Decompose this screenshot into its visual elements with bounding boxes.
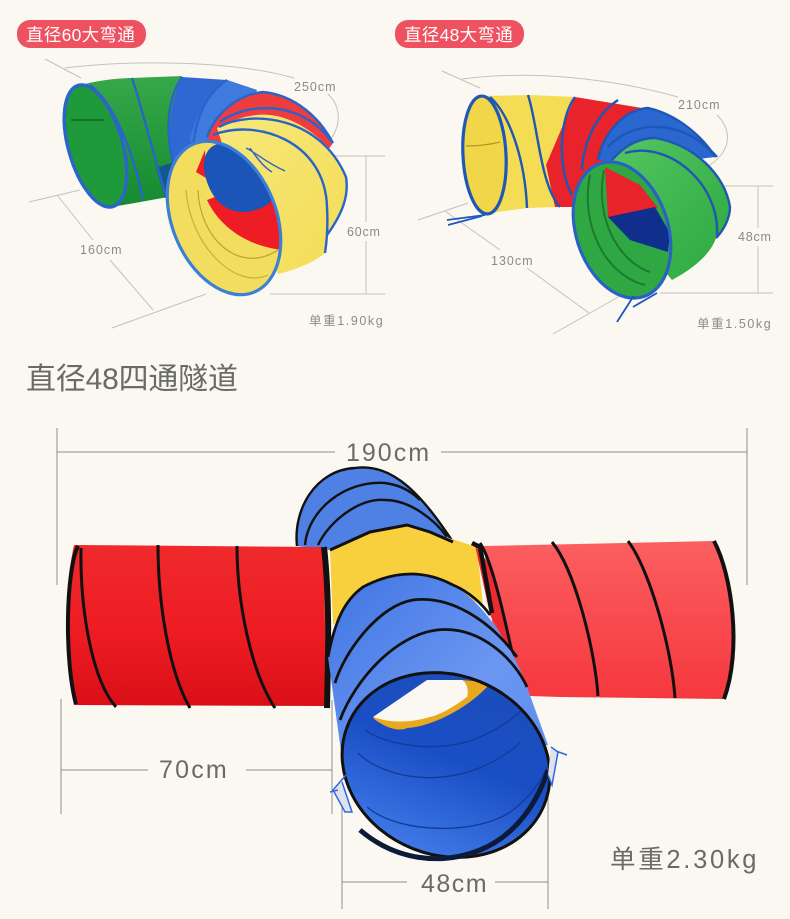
label: 70cm: 70cm	[159, 756, 229, 784]
yellow back section	[217, 115, 347, 274]
label: weight 1.50kg: 单重1.50kg	[697, 316, 772, 331]
yellow section	[482, 95, 575, 213]
label: 60cm: 60cm	[347, 225, 381, 239]
label: 130cm: 130cm	[491, 254, 534, 268]
back blue arm	[297, 467, 453, 550]
heading: four-way tunnel: 直径48四通隧道	[26, 363, 238, 396]
green section	[80, 76, 182, 207]
left red arm	[66, 545, 328, 708]
left opening	[52, 78, 139, 214]
front opening	[557, 149, 687, 311]
front opening	[146, 124, 302, 312]
label: 48cm: 48cm	[421, 870, 488, 898]
label: 190cm: 190cm	[346, 439, 431, 467]
yellow hub	[330, 525, 483, 625]
label: 210cm: 210cm	[678, 98, 721, 112]
label: weight 2.30kg: 单重2.30kg	[610, 846, 759, 874]
right red arm	[472, 541, 733, 699]
dimension lines: 60 tunnel	[29, 59, 385, 328]
front opening	[314, 642, 578, 888]
tunnel: 60cm curved	[52, 76, 347, 312]
badge: diameter 60 tunnel	[17, 20, 146, 48]
tunnel: four-way	[66, 467, 733, 888]
blue section	[170, 77, 257, 170]
tunnel: 48cm curved	[447, 95, 730, 322]
dimension lines: 48 tunnel	[418, 71, 773, 334]
front blue arm	[328, 572, 568, 862]
label: 160cm: 160cm	[80, 243, 123, 257]
ties	[330, 747, 567, 812]
rings	[490, 95, 730, 238]
left opening	[460, 95, 509, 215]
red section	[207, 92, 333, 175]
drawstring	[246, 148, 285, 172]
red section	[546, 97, 650, 207]
label: 250cm: 250cm	[294, 80, 337, 94]
badge: diameter 48 tunnel: 直径48大弯通	[404, 25, 513, 45]
blue section	[598, 108, 715, 165]
badge: diameter 60 tunnel: 直径60大弯通	[26, 25, 135, 45]
green back section	[612, 138, 730, 280]
rings	[90, 77, 347, 253]
label: 48cm: 48cm	[738, 230, 772, 244]
dimension lines: four-way	[57, 428, 747, 909]
badge: diameter 48 tunnel	[395, 20, 524, 48]
label: weight 1.90kg: 单重1.90kg	[309, 313, 384, 328]
ties	[447, 215, 657, 322]
